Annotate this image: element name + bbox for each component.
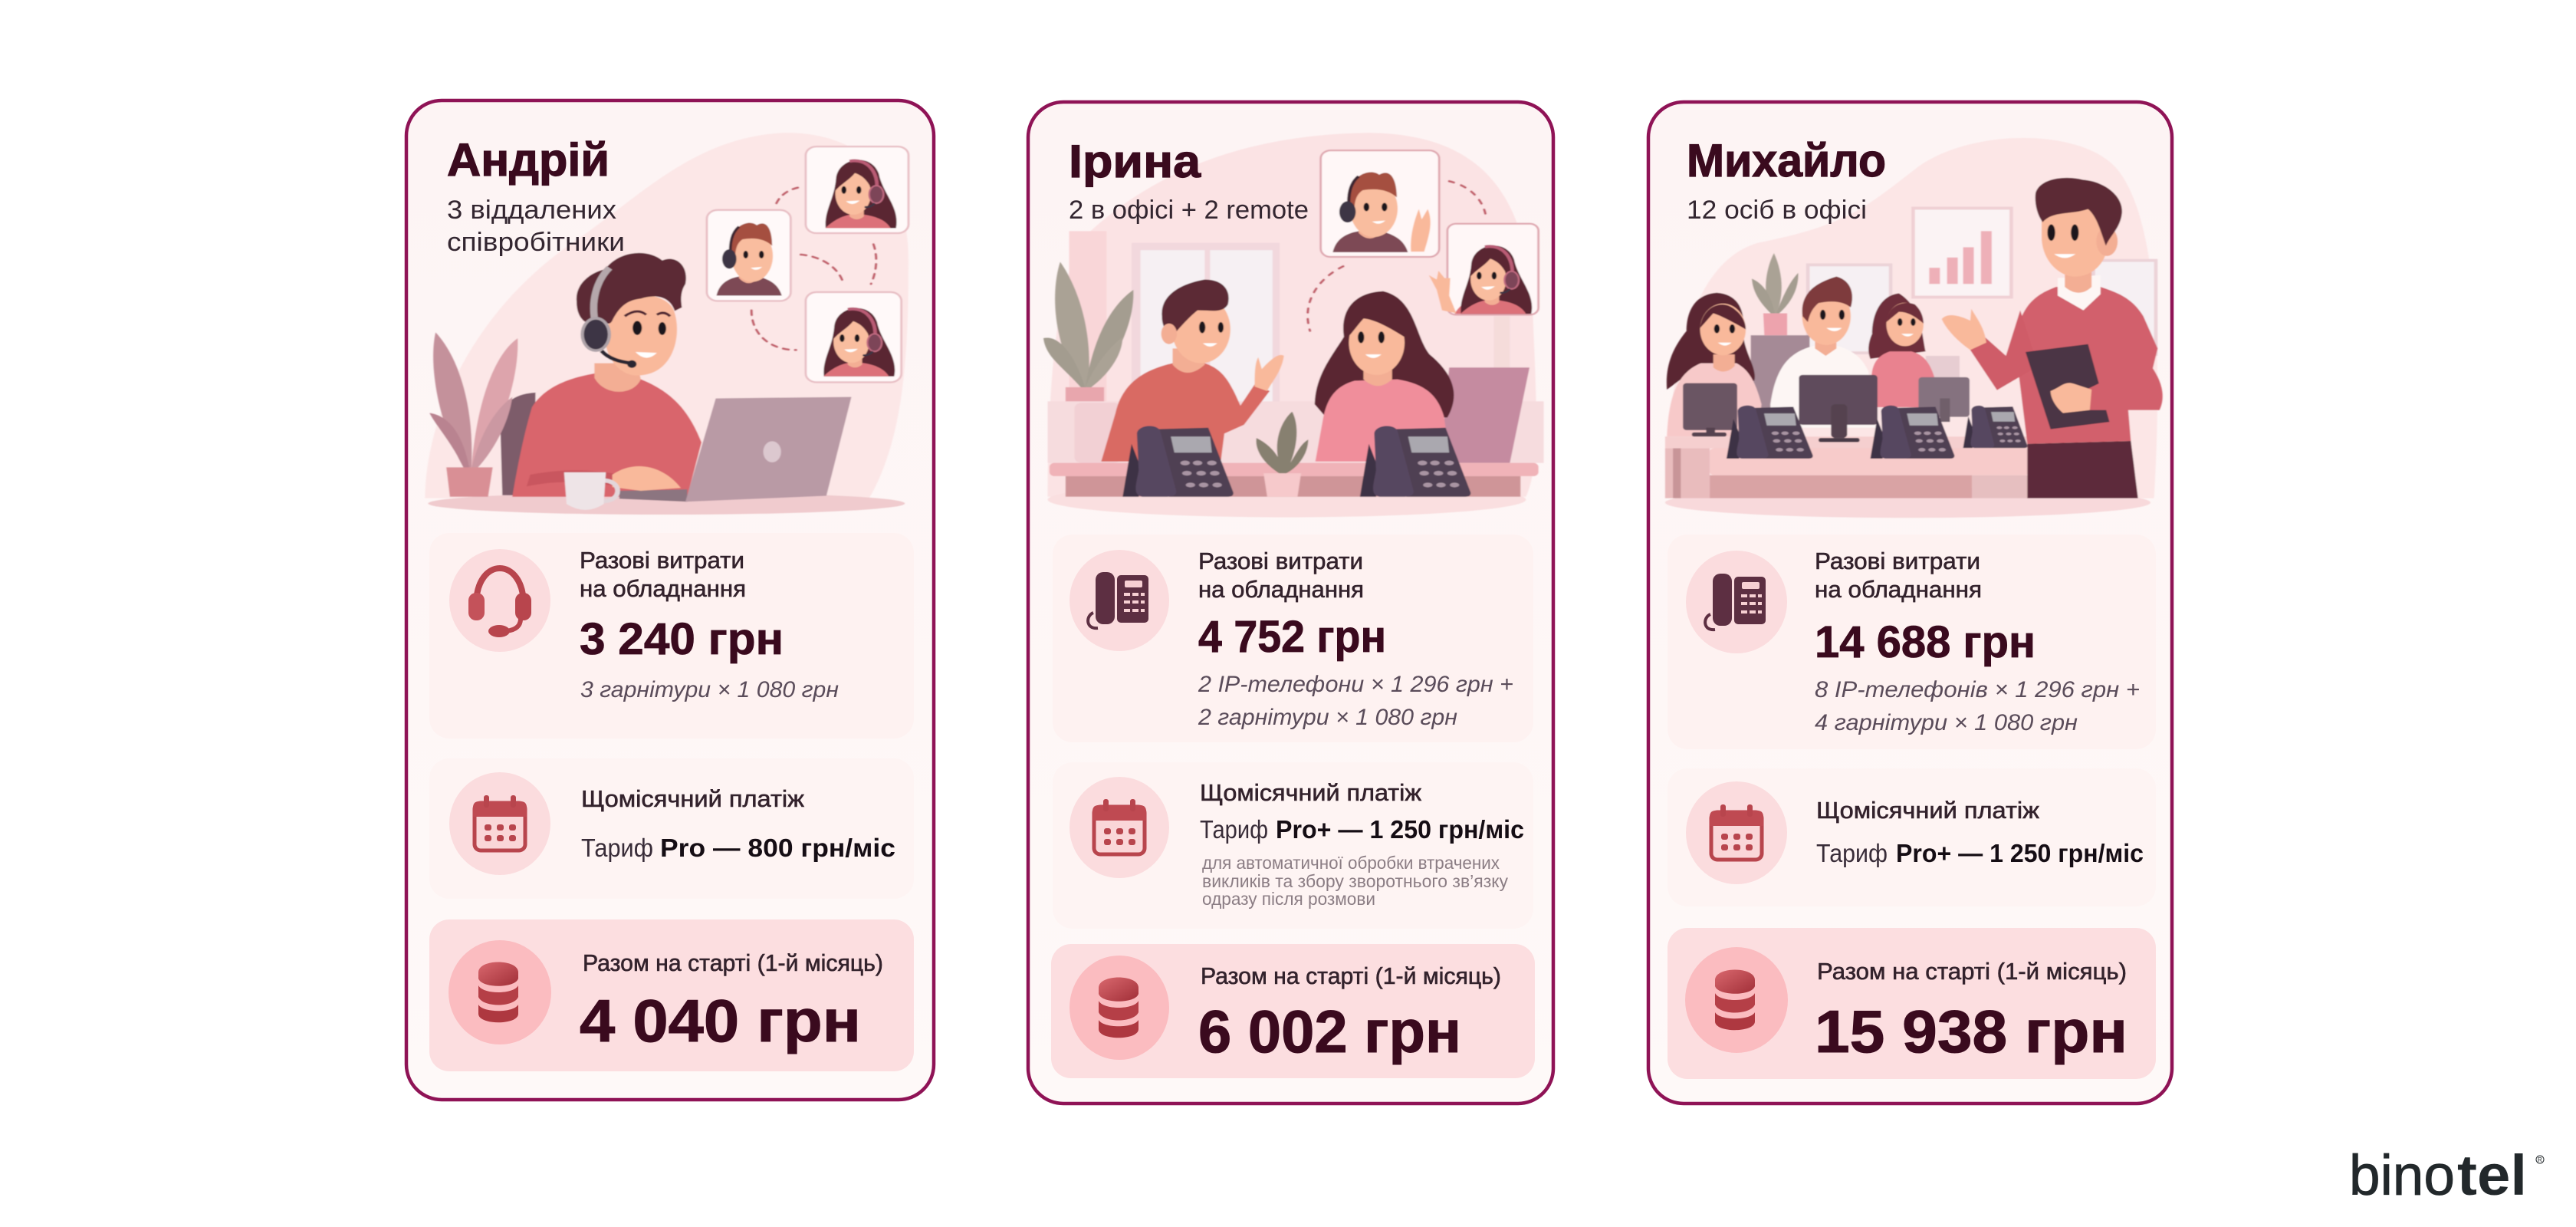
icon: desk phone <box>1705 574 1766 630</box>
row: one-off equipment cost: Разові витрати <box>1815 548 1980 574</box>
row: one-off equipment cost: 8 IP-телефонів × 1 296 грн + <box>1815 677 2140 702</box>
row: one-off equipment cost: Разові витрати <box>1198 548 1363 574</box>
panel: Mykhailo card <box>1648 102 2172 1104</box>
row: total at start: 4 040 грн <box>580 987 861 1054</box>
row: monthly payment: Pro+ — 1 250 грн/міс <box>1896 839 2144 867</box>
heading: Iryna name: Ірина <box>1069 136 1201 187</box>
icon: coin stack <box>478 962 518 1022</box>
heading: Andrii name: Андрій <box>447 134 610 186</box>
icon: calendar <box>1710 804 1763 860</box>
illustration: two office employees with IP phones <box>1043 133 1544 517</box>
row: total at start: 6 002 грн <box>1198 998 1461 1065</box>
illustration: manager presenting to office team <box>1665 138 2163 518</box>
subtitle: Iryna team: 2 в офісі + 2 remote <box>1069 196 1309 225</box>
logo: binotel: R <box>2538 1156 2542 1163</box>
row: total at start <box>429 919 914 1071</box>
row: one-off equipment cost: 4 гарнітури × 1 080 грн <box>1815 710 2078 735</box>
row: monthly payment: Pro — 800 грн/міс <box>660 834 895 862</box>
logo: binotel: bino <box>2349 1143 2455 1207</box>
row: monthly payment <box>1053 762 1533 929</box>
row: monthly payment: Pro+ — 1 250 грн/міс <box>1276 815 1524 844</box>
row: monthly payment <box>1668 768 2156 906</box>
row: total at start: 15 938 грн <box>1815 998 2128 1065</box>
row: one-off equipment cost: 3 гарнітури × 1 080 грн <box>580 677 839 702</box>
row: one-off equipment cost: 2 гарнітури × 1 080 грн <box>1198 705 1457 730</box>
row: one-off equipment cost: 14 688 грн <box>1815 617 2036 667</box>
subtitle: Mykhailo team: 12 осіб в офісі <box>1687 196 1867 225</box>
row: one-off equipment cost: на обладнання <box>580 575 746 602</box>
row: one-off equipment cost: на обладнання <box>1815 576 1982 603</box>
row: monthly payment <box>429 758 914 899</box>
panel: Iryna card <box>1028 102 1553 1104</box>
subtitle: Andrii team: 3 віддалених <box>447 196 616 225</box>
row: one-off equipment cost <box>1053 535 1533 742</box>
heading: Mykhailo name: Михайло <box>1687 135 1886 186</box>
row: one-off equipment cost: на обладнання <box>1198 576 1364 603</box>
row: monthly payment: Щомісячний платіж <box>1200 779 1421 806</box>
row: monthly payment: Тариф <box>581 834 653 862</box>
row: one-off equipment cost: Разові витрати <box>580 547 744 574</box>
row: total at start: Разом на старті (1-й місяць) <box>1201 962 1501 989</box>
icon: desk phone <box>1088 572 1148 628</box>
row: one-off equipment cost: 4 752 грн <box>1198 612 1386 662</box>
row: total at start <box>1668 928 2156 1079</box>
row: total at start: Разом на старті (1-й місяць) <box>583 949 883 976</box>
row: monthly payment: одразу після розмови <box>1202 889 1375 909</box>
logo: binotel: tel <box>2457 1143 2527 1207</box>
row: monthly payment: Тариф <box>1816 839 1888 867</box>
row: monthly payment: для автоматичної обробки втрачених <box>1202 853 1500 873</box>
row: one-off equipment cost <box>429 533 914 739</box>
row: total at start <box>1051 944 1535 1078</box>
row: monthly payment: Тариф <box>1200 815 1268 844</box>
row: one-off equipment cost: 2 IP-телефони × 1 296 грн + <box>1198 672 1513 697</box>
illustration: remote employee with laptop <box>425 133 909 515</box>
row: monthly payment: викликів та збору зворотнього зв’язку <box>1202 871 1508 891</box>
icon: headset <box>468 568 531 637</box>
logo: binotel <box>2349 1143 2544 1207</box>
icon: coin stack <box>1099 977 1138 1038</box>
icon: calendar <box>473 795 527 850</box>
icon: calendar <box>1092 799 1146 854</box>
row: monthly payment: Щомісячний платіж <box>581 785 804 812</box>
row: monthly payment: Щомісячний платіж <box>1816 797 2039 824</box>
row: one-off equipment cost <box>1668 535 2156 749</box>
panel: Andrii card <box>406 100 934 1100</box>
icon: coin stack <box>1715 969 1755 1030</box>
subtitle: Andrii team <box>447 196 625 257</box>
row: one-off equipment cost: 3 240 грн <box>580 614 784 664</box>
subtitle: Andrii team: співробітники <box>447 228 625 257</box>
row: total at start: Разом на старті (1-й місяць) <box>1817 958 2127 985</box>
